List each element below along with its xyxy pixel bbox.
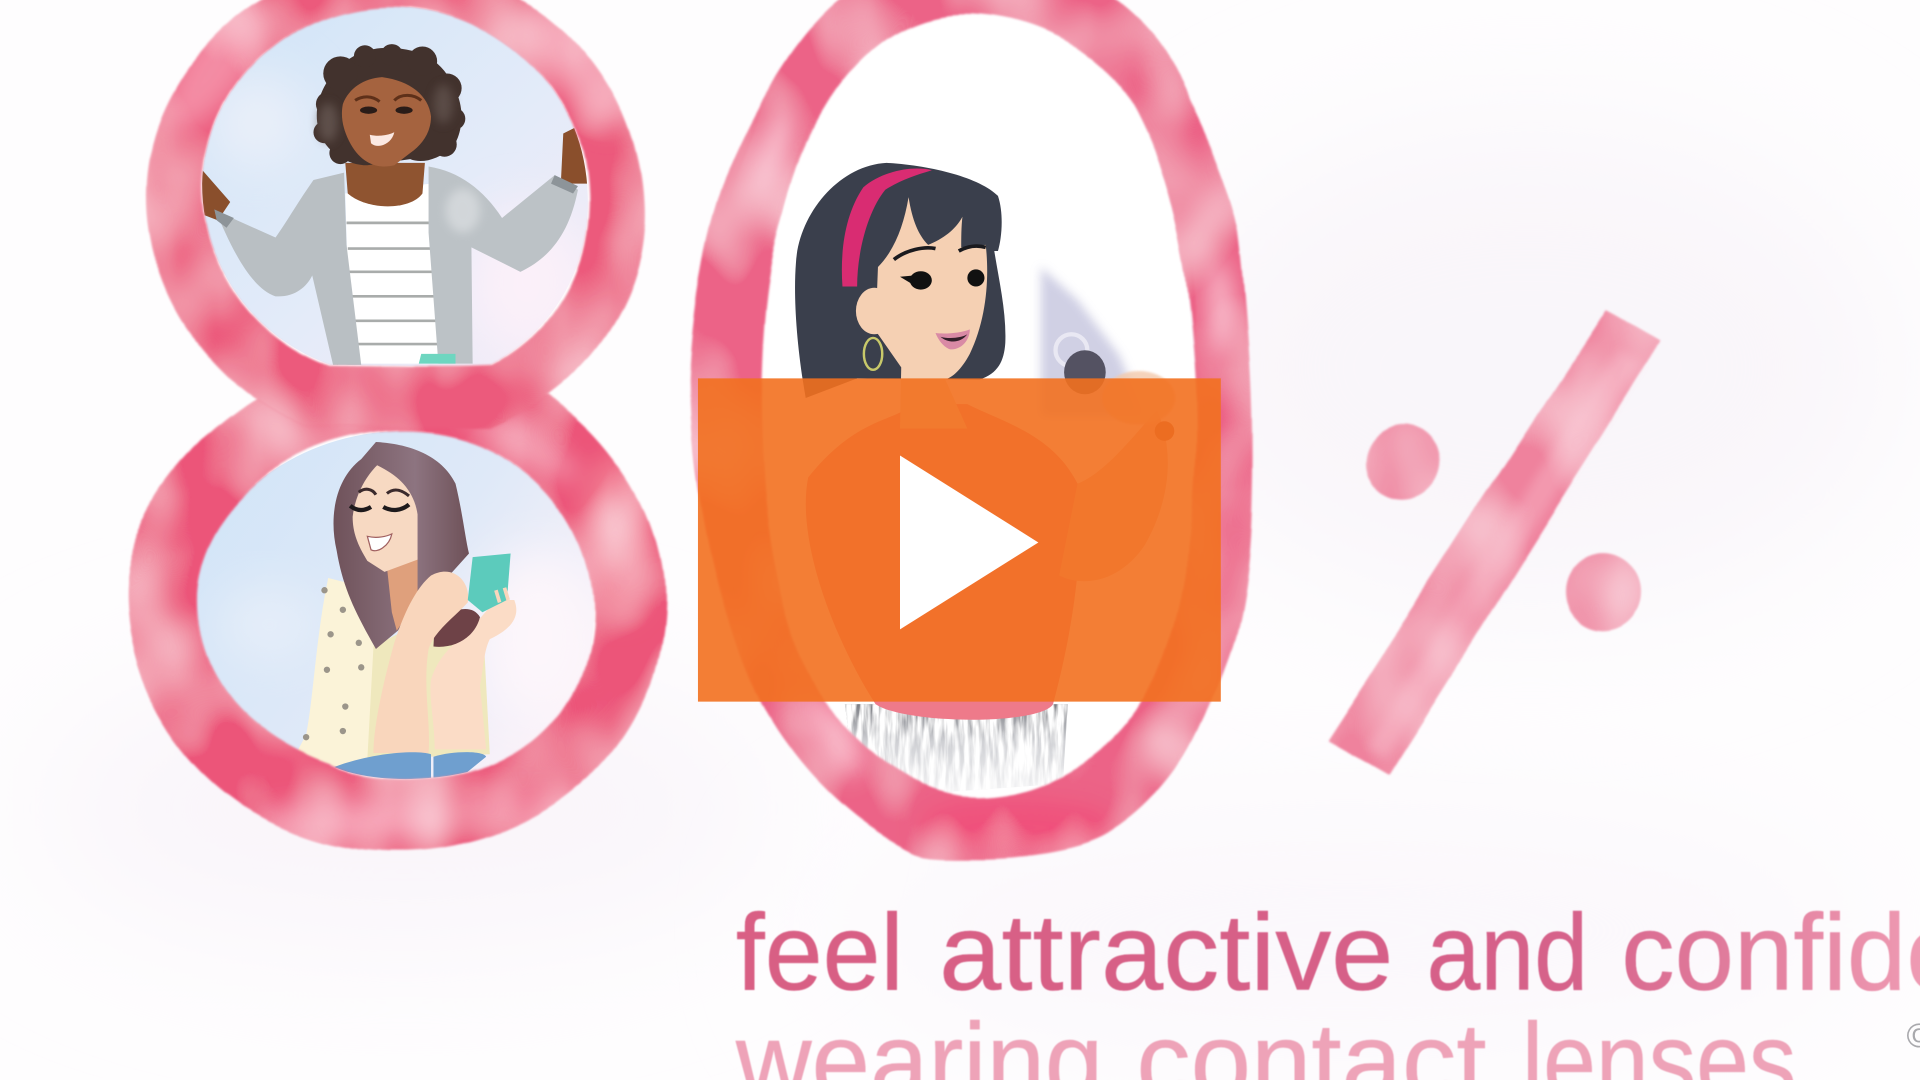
curly hair (313, 44, 465, 165)
caption line 1: and (1427, 891, 1588, 1013)
ring stroke (689, 0, 1252, 857)
ring stroke (147, 0, 643, 427)
percent upper dot (1365, 424, 1441, 500)
scene: woman with dark hair and compact (795, 162, 1174, 792)
percent sign (1327, 310, 1660, 775)
percent lower dot (1564, 552, 1640, 628)
digit 0: woman looking into a compact mirror (689, 0, 1252, 857)
ring stroke (126, 389, 665, 851)
scene: woman shrugging (190, 0, 600, 373)
digit 8: upper ring with woman in grey cardigan (147, 0, 643, 427)
digit 8: lower ring with woman holding a cup (126, 389, 665, 851)
play triangle (900, 456, 1038, 629)
orange play panel (698, 378, 1221, 702)
scene: woman with teal cup (196, 431, 594, 780)
caption line 1: attractive (939, 891, 1393, 1013)
caption line 2 (735, 1000, 1796, 1080)
caption line 1 (736, 891, 1920, 1013)
video play overlay (698, 378, 1221, 702)
percent slash (1327, 310, 1660, 775)
caption line 1: feel (736, 891, 904, 1013)
